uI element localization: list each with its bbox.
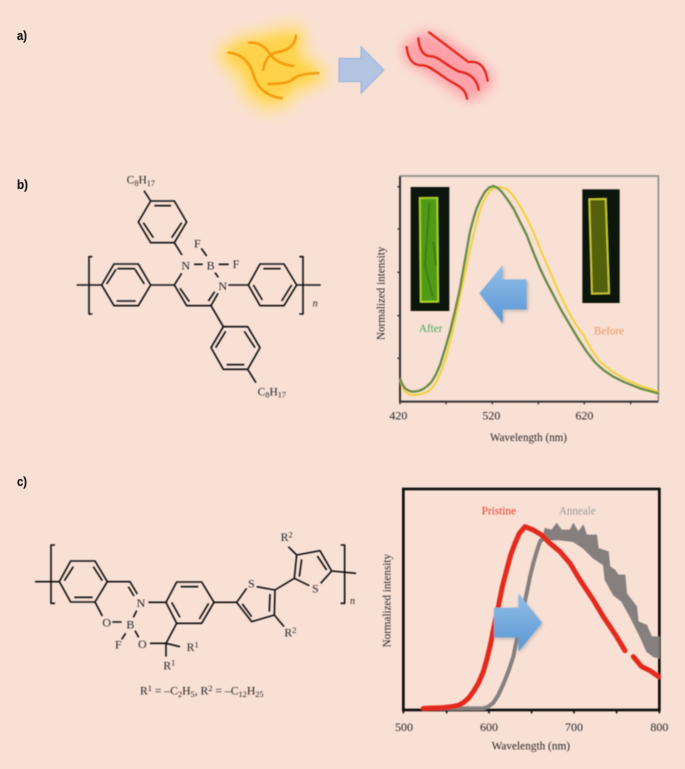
- atom labels: S: [248, 577, 255, 591]
- atom labels: 2: [288, 530, 293, 539]
- atom labels: 8: [265, 391, 269, 400]
- atom labels: 2: [292, 626, 296, 635]
- axis tick labels: 620: [575, 408, 593, 422]
- arrow: blue right: [339, 47, 384, 93]
- atom labels: R: [284, 627, 292, 640]
- atom labels: O: [138, 637, 147, 651]
- atom labels: n: [350, 596, 355, 607]
- substituent legend: 2: [178, 690, 182, 699]
- label: c): c): [17, 474, 27, 489]
- atom labels: R: [187, 641, 194, 654]
- atom labels: R: [163, 659, 171, 672]
- plot frame and axes: [397, 176, 658, 404]
- axis tick labels: 800: [650, 720, 668, 734]
- atom labels: [127, 174, 318, 400]
- atom labels: S: [312, 581, 319, 595]
- atom labels: N: [218, 279, 227, 293]
- chart b: emission spectra before and after: [375, 176, 658, 422]
- curve: before (yellow): [400, 187, 658, 395]
- axis tick labels: 520: [482, 408, 500, 422]
- atom labels: [102, 530, 355, 672]
- series labels: [482, 504, 596, 517]
- panel a: polymer chain illustration: [215, 22, 492, 113]
- atom labels: n: [313, 298, 318, 309]
- substituent legend: , R: [195, 685, 209, 698]
- atom labels: C: [258, 385, 265, 398]
- atom labels: H: [269, 385, 278, 398]
- atom labels: C: [127, 174, 134, 187]
- axis tick labels: 500: [395, 720, 413, 734]
- atom labels: 1: [171, 659, 175, 668]
- curve: annealed (grey): [423, 523, 659, 708]
- inset photo: after: [411, 187, 449, 311]
- substituent legend: 25: [255, 690, 264, 699]
- axis tick labels: 700: [565, 720, 583, 734]
- label: a): a): [17, 28, 27, 43]
- curve: pristine (red): [423, 527, 659, 708]
- arrow: blue left: [479, 265, 528, 325]
- substituent legend: H: [247, 685, 256, 698]
- arrow: blue right: [494, 593, 543, 653]
- axis tick labels: 420: [389, 408, 407, 422]
- panel b: chemical structure: [77, 174, 321, 400]
- y axis title: Normalized intensity: [375, 247, 388, 340]
- red glowing aligned chains: [402, 31, 492, 103]
- substituent legend: R: [140, 685, 148, 698]
- substituent legend: 1: [148, 684, 152, 693]
- atom labels: 17: [147, 179, 155, 188]
- atom labels: F: [115, 638, 122, 652]
- y axis title: Normalized intensity: [382, 554, 394, 647]
- substituent legend: 2: [208, 684, 213, 693]
- substituent legend: = –C: [213, 685, 239, 698]
- atom labels: 17: [278, 391, 286, 400]
- substituent legend: 12: [239, 690, 247, 699]
- backbone bonds and rings: [35, 545, 356, 657]
- axis tick labels: [389, 408, 593, 422]
- chart c: emission spectra pristine and annealed: [382, 489, 668, 752]
- atom labels: N: [137, 596, 146, 610]
- atom labels: 8: [134, 179, 138, 188]
- substituent legend: = –C: [152, 685, 178, 698]
- curve: after (green): [400, 186, 658, 393]
- series labels: [419, 322, 624, 337]
- panel c: chemical structure: [35, 530, 356, 699]
- series labels: Before: [594, 324, 624, 337]
- axis tick labels: [395, 720, 668, 734]
- series labels: Pristine: [482, 504, 516, 517]
- atom labels: F: [233, 257, 240, 271]
- atom labels: 1: [194, 640, 199, 649]
- atom labels: R: [281, 531, 288, 544]
- x axis title b: Wavelength (nm): [490, 432, 567, 444]
- atom labels: B: [126, 618, 134, 632]
- substituent legend: 5: [191, 690, 195, 699]
- atom labels: H: [138, 174, 147, 187]
- label: b): b): [17, 177, 28, 192]
- atom labels: N: [181, 258, 190, 272]
- backbone bonds and rings: [77, 191, 321, 383]
- plot frame and axes: [403, 489, 659, 713]
- x axis title: Wavelength (nm): [492, 739, 570, 752]
- atom labels: O: [102, 615, 111, 629]
- substituent legend: H: [182, 685, 191, 698]
- atom labels: B: [207, 258, 215, 272]
- axis tick labels: 600: [480, 720, 498, 734]
- yellow glowing tangled chains: [215, 22, 328, 113]
- series labels: After: [419, 322, 442, 335]
- series labels: Anneale: [559, 504, 596, 517]
- atom labels: F: [194, 237, 201, 251]
- inset photo: before: [582, 189, 620, 303]
